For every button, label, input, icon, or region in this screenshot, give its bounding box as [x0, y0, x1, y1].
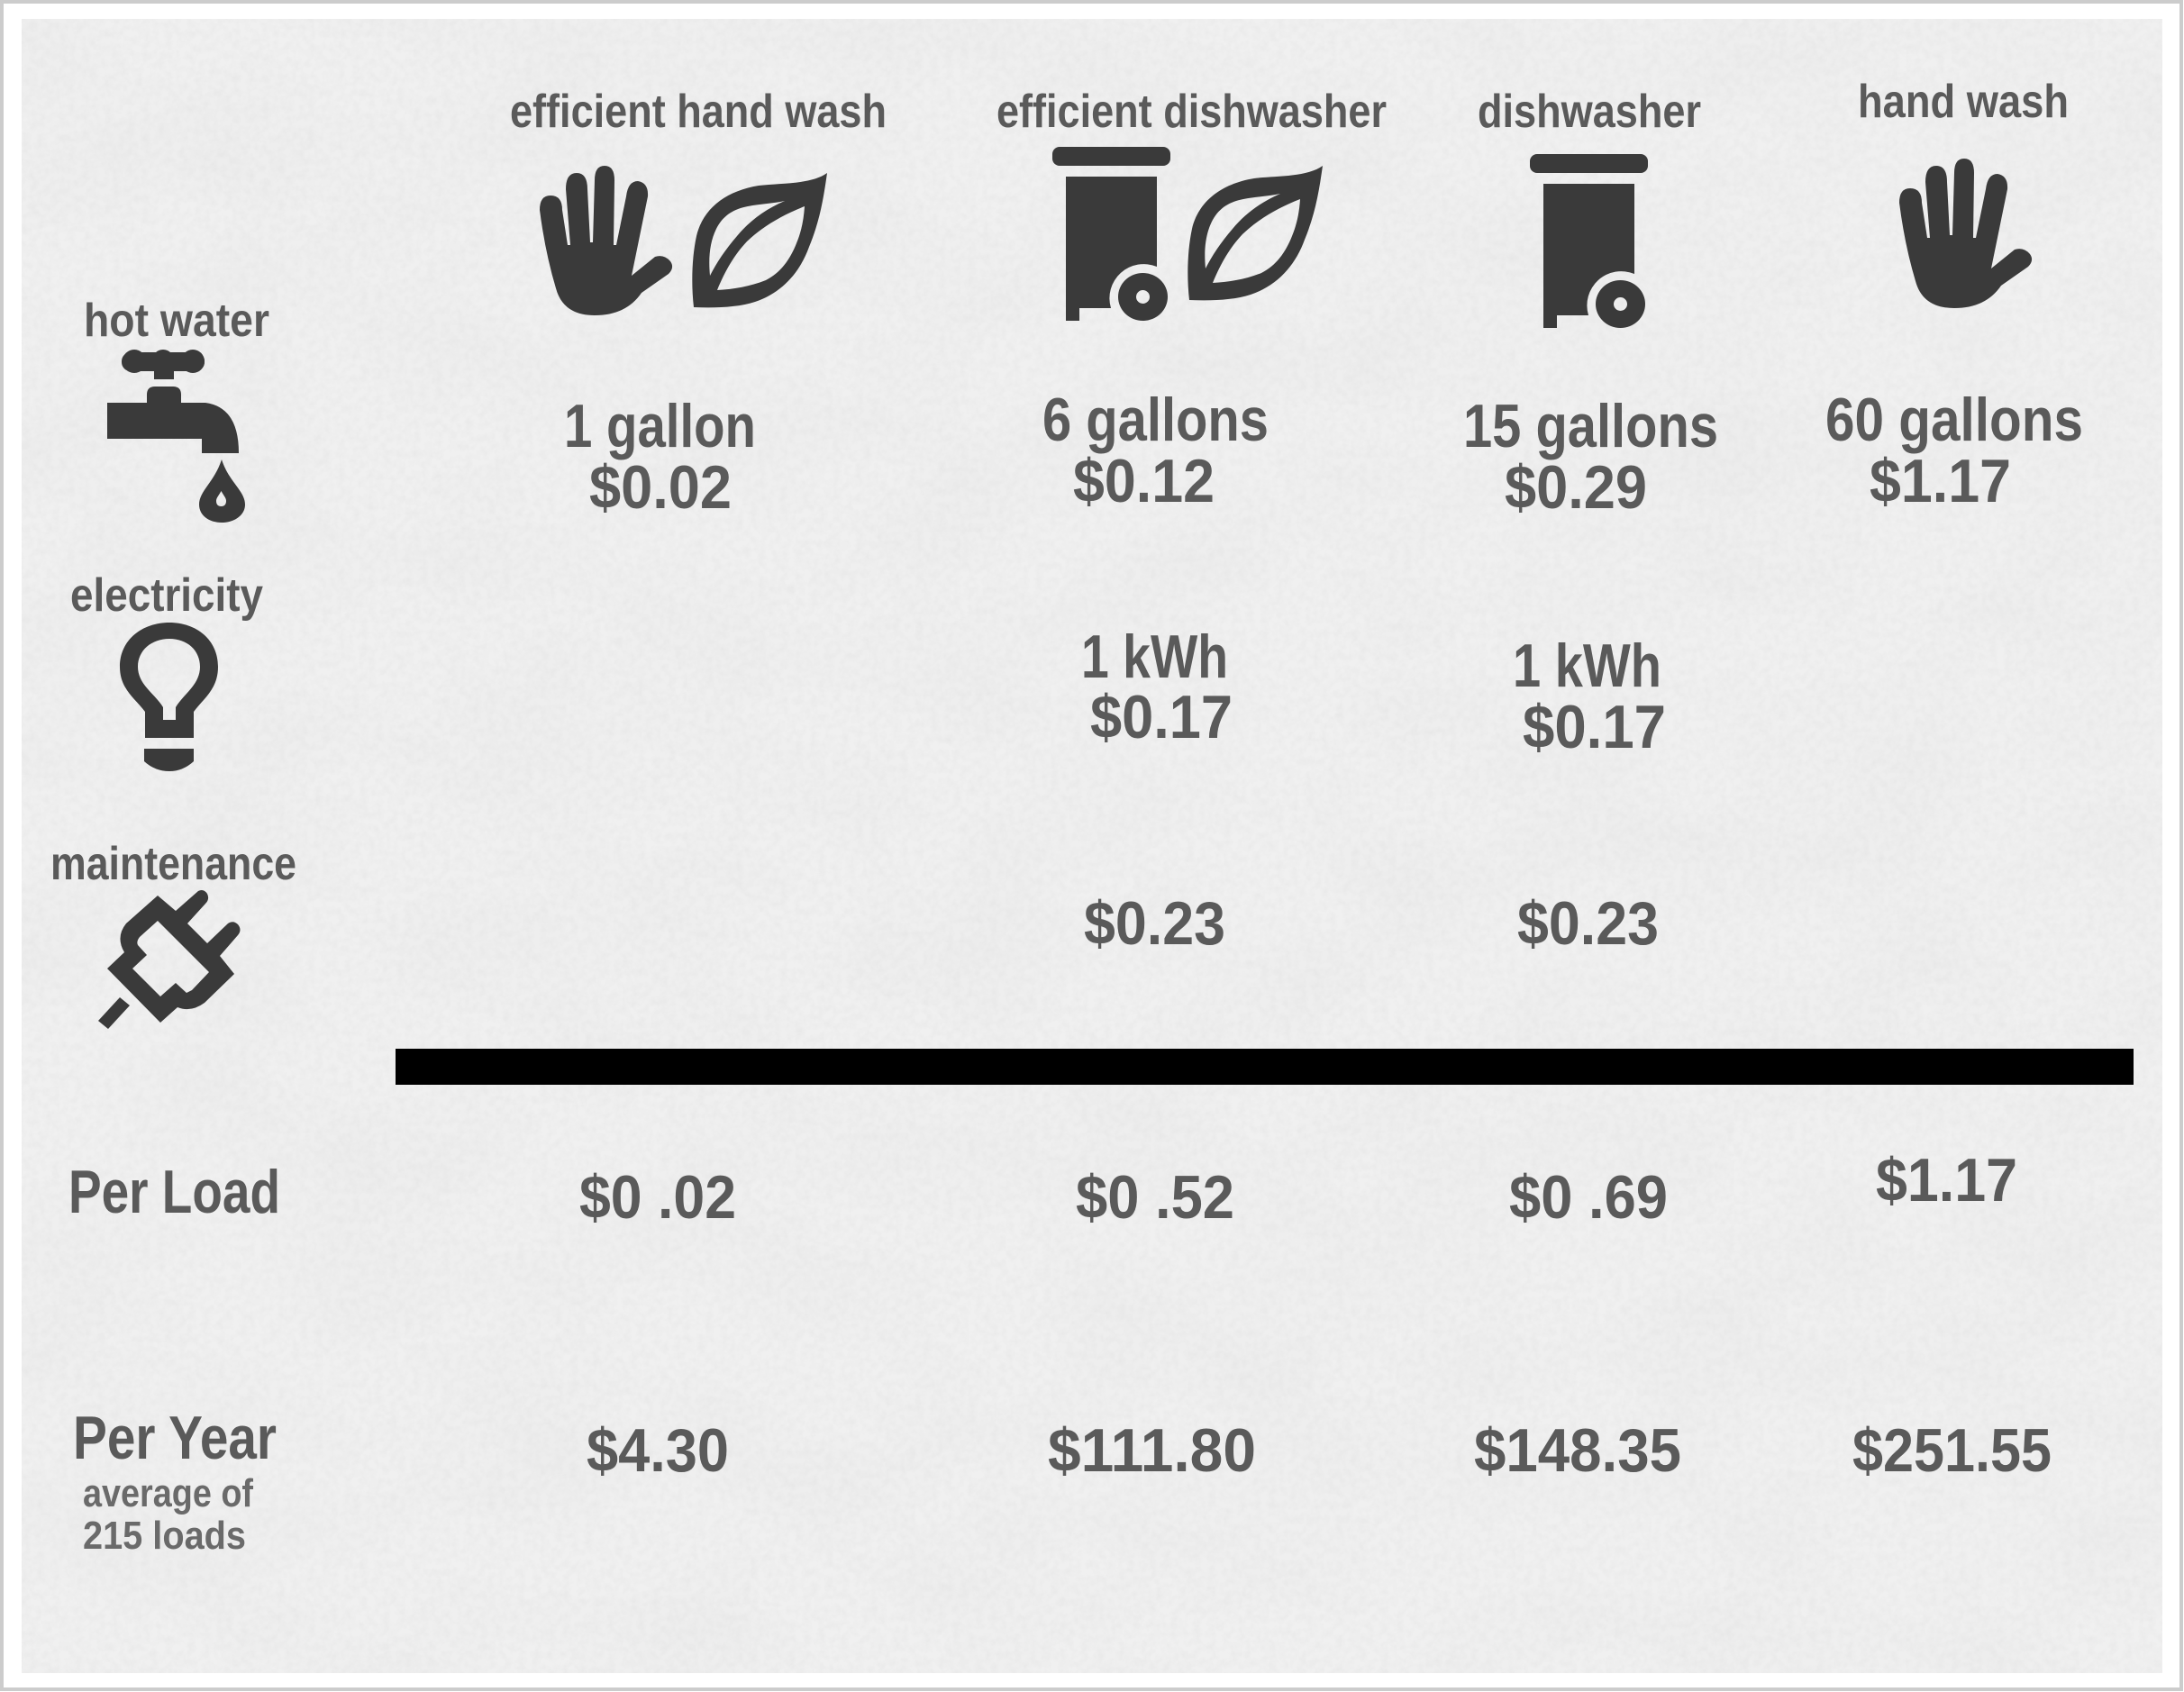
electricity cost: dishwasher: $0.17: [1523, 693, 1666, 761]
water: hand wash: 60 gallons: [1825, 386, 2083, 454]
note: average of 215 loads: 215 loads: [83, 1514, 246, 1558]
header: efficient hand wash: efficient hand wash: [510, 86, 887, 138]
water: efficient dishwasher: 6 gallons: [1042, 386, 1269, 454]
row label: per year: Per Year: [73, 1404, 277, 1472]
note: average of 215 loads: [83, 1471, 253, 1558]
row label: hot water: hot water: [84, 295, 269, 347]
icon: bin, efficient dishwasher: [1052, 147, 1170, 321]
electricity cost: efficient dishwasher: $0.17: [1090, 683, 1233, 751]
header: efficient dishwasher: efficient dishwasher: [996, 86, 1387, 138]
note: average of 215 loads: average of: [83, 1471, 253, 1515]
per load: efficient hand wash: $0 .02: [579, 1163, 736, 1232]
water cost: efficient hand wash: $0.02: [589, 453, 732, 522]
icon: faucet with water drop: [107, 350, 245, 523]
per year: dishwasher: $148.35: [1474, 1416, 1681, 1485]
icon: leaf, efficient hand wash: [692, 173, 827, 307]
electricity: dishwasher: 1 kWh: [1513, 632, 1661, 700]
header: hand wash: hand wash: [1858, 76, 2069, 128]
icon: hand, hand wash: [1899, 159, 2032, 308]
header: dishwasher: dishwasher: [1478, 86, 1701, 138]
water cost: dishwasher: $0.29: [1505, 453, 1647, 522]
divider bar: [396, 1049, 2134, 1085]
row label: electricity: electricity: [70, 569, 263, 622]
electricity: efficient dishwasher: 1 kWh: [1081, 623, 1228, 691]
icon: leaf, efficient dishwasher: [1188, 166, 1323, 300]
maintenance cost: efficient dishwasher: $0.23: [1084, 889, 1225, 958]
per load: efficient dishwasher: $0 .52: [1076, 1163, 1234, 1232]
per load: dishwasher: $0 .69: [1509, 1163, 1668, 1232]
icon: electrical plug: [98, 890, 240, 1029]
icon: hand, efficient hand wash: [540, 166, 672, 315]
per load: hand wash: $1.17: [1876, 1146, 2017, 1214]
icon: bin, dishwasher: [1530, 154, 1648, 328]
water: efficient hand wash: 1 gallon: [564, 392, 756, 460]
row label: per load: Per Load: [68, 1158, 280, 1226]
water: dishwasher: 15 gallons: [1463, 392, 1718, 460]
per year: hand wash: $251.55: [1852, 1416, 2052, 1485]
per year: efficient dishwasher: $111.80: [1048, 1416, 1256, 1485]
maintenance cost: dishwasher: $0.23: [1517, 889, 1659, 958]
water cost: hand wash: $1.17: [1870, 447, 2011, 515]
icon: light bulb: [120, 623, 218, 771]
row label: maintenance: maintenance: [50, 838, 296, 890]
per year: efficient hand wash: $4.30: [587, 1416, 729, 1485]
water cost: efficient dishwasher: $0.12: [1073, 447, 1215, 515]
